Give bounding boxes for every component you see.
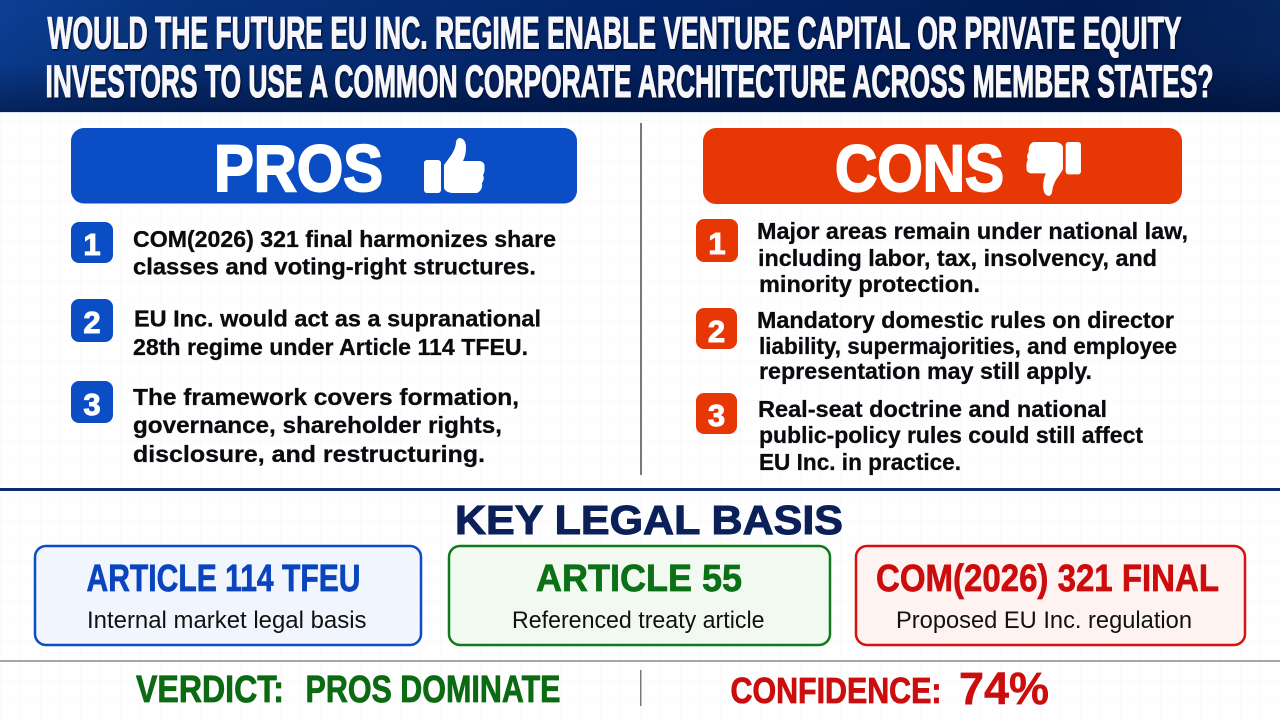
cons heading banner: CONS [835,131,1004,205]
card: com(2026) 321 final [856,546,1245,645]
column divider [640,123,642,475]
pro item 1: classes and voting-right structures. [133,254,536,280]
con item 2: representation may still apply. [759,358,1092,384]
con item 3: public-policy rules could still affect [759,422,1143,448]
con item 1: Major areas remain under national law, [757,218,1188,244]
footer divider [640,670,642,706]
verdict: VERDICT: [136,669,284,711]
footer rule [0,660,1280,662]
title [46,8,1214,107]
pro item 2: 28th regime under Article 114 TFEU. [133,334,528,360]
pro item 1: COM(2026) 321 final harmonizes share [133,226,556,252]
confidence: 74% [959,663,1049,714]
verdict: PROS DOMINATE [306,669,560,711]
con item 2: liability, supermajorities, and employee [759,333,1177,359]
verdict [136,669,560,711]
con item 3: EU Inc. in practice. [759,449,961,475]
pro item 1 [71,222,556,280]
con item 3: Real-seat doctrine and national [758,396,1107,422]
con item 3 [696,393,1143,475]
con item 1: minority protection. [759,271,980,297]
con item 1: 1 [708,226,726,261]
confidence [730,663,1049,714]
pros heading banner: PROS [214,131,383,205]
con item 1: including labor, tax, insolvency, and [758,245,1157,271]
icon: thumbs down [1026,142,1081,196]
card: article 55: Referenced treaty article [512,607,764,634]
con item 2: Mandatory domestic rules on director [757,307,1174,333]
confidence: CONFIDENCE: [730,670,942,711]
panel: pros [71,128,577,467]
pro item 3: disclosure, and restructuring. [133,441,485,467]
pro item 1: 1 [83,227,101,262]
header banner [0,0,1280,113]
pro item 3: The framework covers formation, [133,384,519,410]
card: article 114 tfeu [35,546,421,645]
card: com(2026) 321 final: Proposed EU Inc. regulation [896,607,1192,634]
pro item 3 [71,381,519,467]
card: article 114 tfeu: Internal market legal basis [87,607,366,634]
card: article 114 tfeu: ARTICLE 114 TFEU [86,558,360,600]
con item 2 [696,307,1177,384]
icon: thumbs up [424,138,485,193]
card: article 55 [449,546,830,645]
pro item 3: 3 [83,387,101,422]
con item 1 [696,218,1188,297]
card: com(2026) 321 final: COM(2026) 321 FINAL [876,558,1219,600]
card: article 55: ARTICLE 55 [536,558,742,600]
con item 3: 3 [708,398,725,433]
pro item 3: governance, shareholder rights, [133,412,502,438]
pro item 2: EU Inc. would act as a supranational [134,306,541,332]
heading: key legal basis: KEY LEGAL BASIS [455,497,843,543]
pros heading banner [71,128,577,205]
pro item 2 [71,299,541,360]
pro item 2: 2 [83,305,101,340]
con item 2: 2 [708,314,725,349]
panel: cons [696,128,1188,475]
cons heading banner [703,128,1182,205]
section rule [0,488,1280,491]
